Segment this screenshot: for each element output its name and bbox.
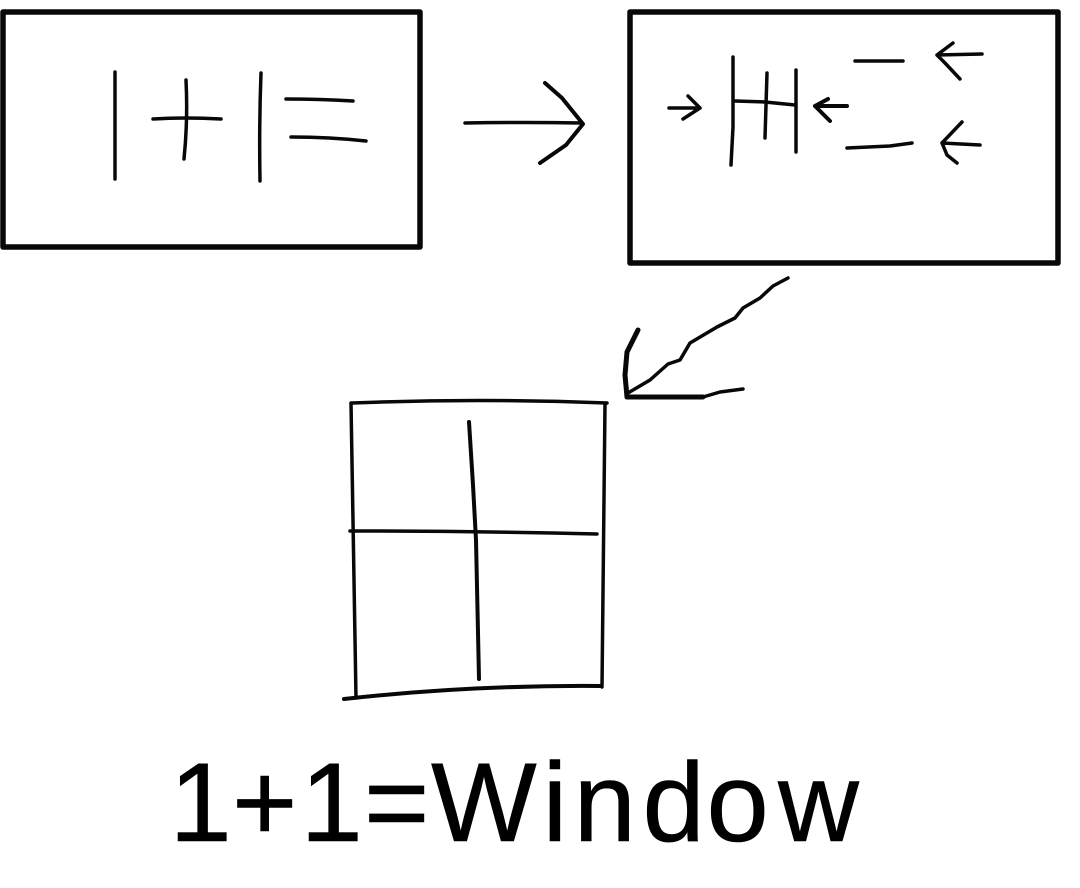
arrow: down-left bbox=[625, 278, 788, 397]
title: 1+1=Window: 1+1=Window bbox=[170, 740, 860, 865]
panel: second box with strokes moving together bbox=[630, 12, 1058, 263]
arrow: right bbox=[465, 83, 583, 163]
panel: first box showing 1+1= strokes bbox=[3, 12, 420, 247]
panel: window drawing bbox=[344, 400, 607, 699]
